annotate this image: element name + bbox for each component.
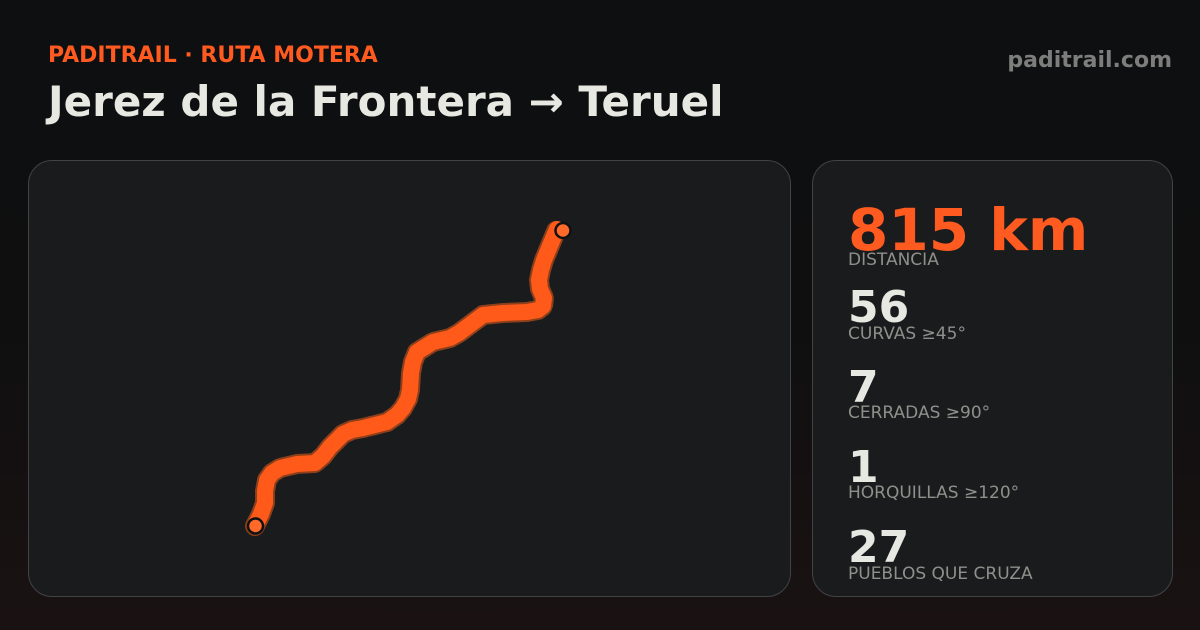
end marker xyxy=(556,223,570,238)
stat value: sharp turns: 7 xyxy=(848,362,879,413)
panel: route map xyxy=(28,160,791,597)
stat value: towns: 27 xyxy=(848,522,909,573)
eyebrow: brand label: PADITRAIL · RUTA MOTERA xyxy=(48,43,378,68)
route line xyxy=(255,229,557,526)
panel: stats xyxy=(812,160,1173,597)
site url: paditrail.com xyxy=(1007,48,1172,73)
stat label: curves: CURVAS ≥45° xyxy=(848,324,966,344)
stat value: curves: 56 xyxy=(848,282,909,333)
stat label: distance: DISTANCIA xyxy=(848,250,939,270)
title: Jerez de la Frontera → Teruel xyxy=(48,77,724,126)
stat value: distance: 815 km xyxy=(848,196,1088,264)
start marker xyxy=(248,518,263,534)
stat value: hairpins: 1 xyxy=(848,442,879,493)
stat label: sharp turns: CERRADAS ≥90° xyxy=(848,403,990,423)
stat label: hairpins: HORQUILLAS ≥120° xyxy=(848,483,1019,503)
stat label: towns: PUEBLOS QUE CRUZA xyxy=(848,564,1033,584)
